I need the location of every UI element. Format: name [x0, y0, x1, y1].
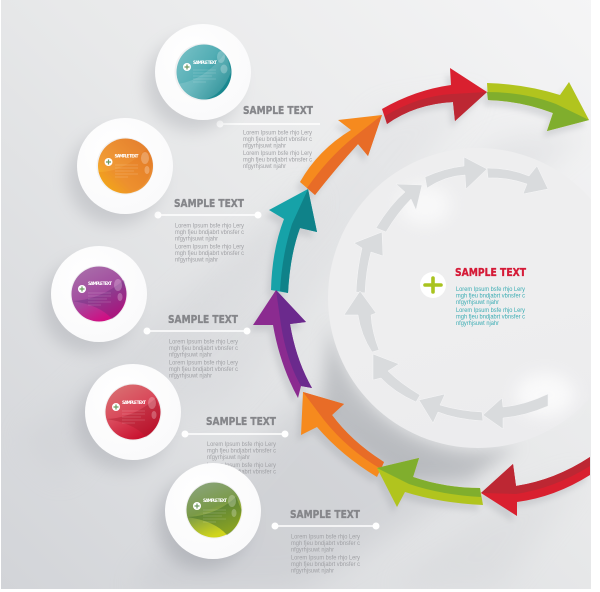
badge: orange: SAMPLE TEXT: [114, 154, 139, 158]
center content: [420, 266, 526, 327]
body 1: Lorem Ipsum bsfe rhjo Lery: [243, 150, 312, 157]
arrow: teal: [269, 189, 317, 293]
center heading: SAMPLE TEXT: [455, 266, 526, 279]
center body text: mgh fjeu bndjabrt vbnsfer c: [456, 292, 526, 300]
body 2: [175, 222, 245, 264]
arrow: lower orange: [301, 392, 384, 477]
body 2: nfgyrhjsuwt njahr: [175, 236, 219, 242]
body 5: mgh fjeu bndjabrt vbnsfer c: [291, 561, 361, 568]
body 5: Lorem Ipsum bsfe rhjo Lery: [291, 534, 360, 540]
body 2: mgh fjeu bndjabrt vbnsfer c: [175, 229, 245, 236]
body 1: mgh fjeu bndjabrt vbnsfer c: [243, 136, 313, 143]
text block: item 5: [272, 508, 380, 574]
body 3: nfgyrhjsuwt njahr: [169, 372, 213, 380]
body 3: Lorem Ipsum bsfe rhjo Lery: [169, 338, 238, 346]
heading 5: SAMPLE TEXT: [290, 508, 360, 521]
ghost arrow: lower orange: [373, 354, 420, 402]
ghost arrow: left purple: [344, 291, 379, 352]
text block: item 2: [154, 197, 262, 264]
ghost arrow: top orange: [376, 184, 422, 232]
heading 1: SAMPLE TEXT: [243, 104, 313, 117]
arrow: top green: [487, 82, 589, 131]
body 4: mgh fjeu bndjabrt vbnsfer c: [207, 468, 277, 476]
badge: purple: SAMPLE TEXT: [88, 281, 112, 286]
badge: orange: [68, 118, 173, 225]
body 1: nfgyrhjsuwt njahr: [243, 163, 287, 170]
badge: teal: [146, 24, 251, 131]
body 2: mgh fjeu bndjabrt vbnsfer c: [175, 250, 245, 257]
arrow shadows: [249, 74, 586, 522]
body 5: [291, 534, 361, 574]
ghost arrow: top green: [487, 166, 548, 194]
center body text: Lorem Ipsum bsfe rhjo Lery: [456, 286, 525, 293]
body 5: mgh fjeu bndjabrt vbnsfer c: [291, 540, 361, 547]
ghost arrow: lower red: [483, 394, 548, 429]
center body text: nfgyrhjsuwt njahr: [456, 320, 500, 327]
body 2: nfgyrhjsuwt njahr: [175, 256, 219, 264]
center body text: nfgyrhjsuwt njahr: [456, 299, 500, 306]
heading 2: SAMPLE TEXT: [174, 197, 244, 210]
badge: red: SAMPLE TEXT: [122, 400, 146, 405]
arrow: top red: [382, 68, 487, 124]
badge: purple: [42, 246, 147, 353]
body 3: mgh fjeu bndjabrt vbnsfer c: [169, 366, 239, 373]
body 1: mgh fjeu bndjabrt vbnsfer c: [243, 156, 313, 164]
heading 3: SAMPLE TEXT: [168, 313, 238, 326]
body 5: nfgyrhjsuwt njahr: [291, 568, 335, 574]
ghost arrow: top red: [425, 157, 487, 189]
body 2: Lorem Ipsum bsfe rhjo Lery: [175, 244, 244, 250]
arrow: lower green: [377, 458, 483, 507]
body 4: Lorem Ipsum bsfe rhjo Lery: [207, 441, 276, 448]
badge: teal: SAMPLE TEXT: [193, 60, 217, 65]
body 3: [169, 338, 239, 380]
ghost arrow: lower green: [419, 394, 483, 423]
body 3: mgh fjeu bndjabrt vbnsfer c: [169, 345, 239, 352]
body 2: Lorem Ipsum bsfe rhjo Lery: [175, 222, 244, 230]
body 4: nfgyrhjsuwt njahr: [207, 454, 251, 461]
badge: green: [156, 463, 261, 569]
text block: item 3: [144, 313, 250, 380]
body 3: Lorem Ipsum bsfe rhjo Lery: [169, 360, 238, 366]
center body text: [456, 286, 526, 327]
body 4: [207, 441, 277, 476]
arrow: lower red: [481, 457, 590, 516]
text block: item 4: [182, 415, 288, 476]
body 1: Lorem Ipsum bsfe rhjo Lery: [243, 130, 312, 136]
ghost arrow: left teal: [354, 232, 383, 293]
center body text: mgh fjeu bndjabrt vbnsfer c: [456, 314, 526, 320]
body 3: nfgyrhjsuwt njahr: [169, 352, 213, 358]
center plus icon: [420, 272, 446, 298]
arrow: purple: [253, 290, 312, 398]
center body text: Lorem Ipsum bsfe rhjo Lery: [456, 307, 525, 314]
badge: red: [76, 364, 181, 471]
arrow: top orange: [300, 115, 382, 195]
body 5: Lorem Ipsum bsfe rhjo Lery: [291, 554, 360, 562]
body 1: nfgyrhjsuwt njahr: [243, 142, 287, 150]
large glass disc: [320, 148, 600, 480]
text block: item 1: [216, 104, 320, 170]
body 1: [243, 130, 313, 170]
body 5: nfgyrhjsuwt njahr: [291, 546, 335, 554]
badge: green: SAMPLE TEXT: [203, 498, 227, 503]
body 4: Lorem Ipsum bsfe rhjo Lery: [207, 462, 276, 469]
heading 4: SAMPLE TEXT: [206, 415, 276, 428]
ghost arrow ring: [344, 157, 548, 429]
body 4: mgh fjeu bndjabrt vbnsfer c: [207, 448, 277, 454]
